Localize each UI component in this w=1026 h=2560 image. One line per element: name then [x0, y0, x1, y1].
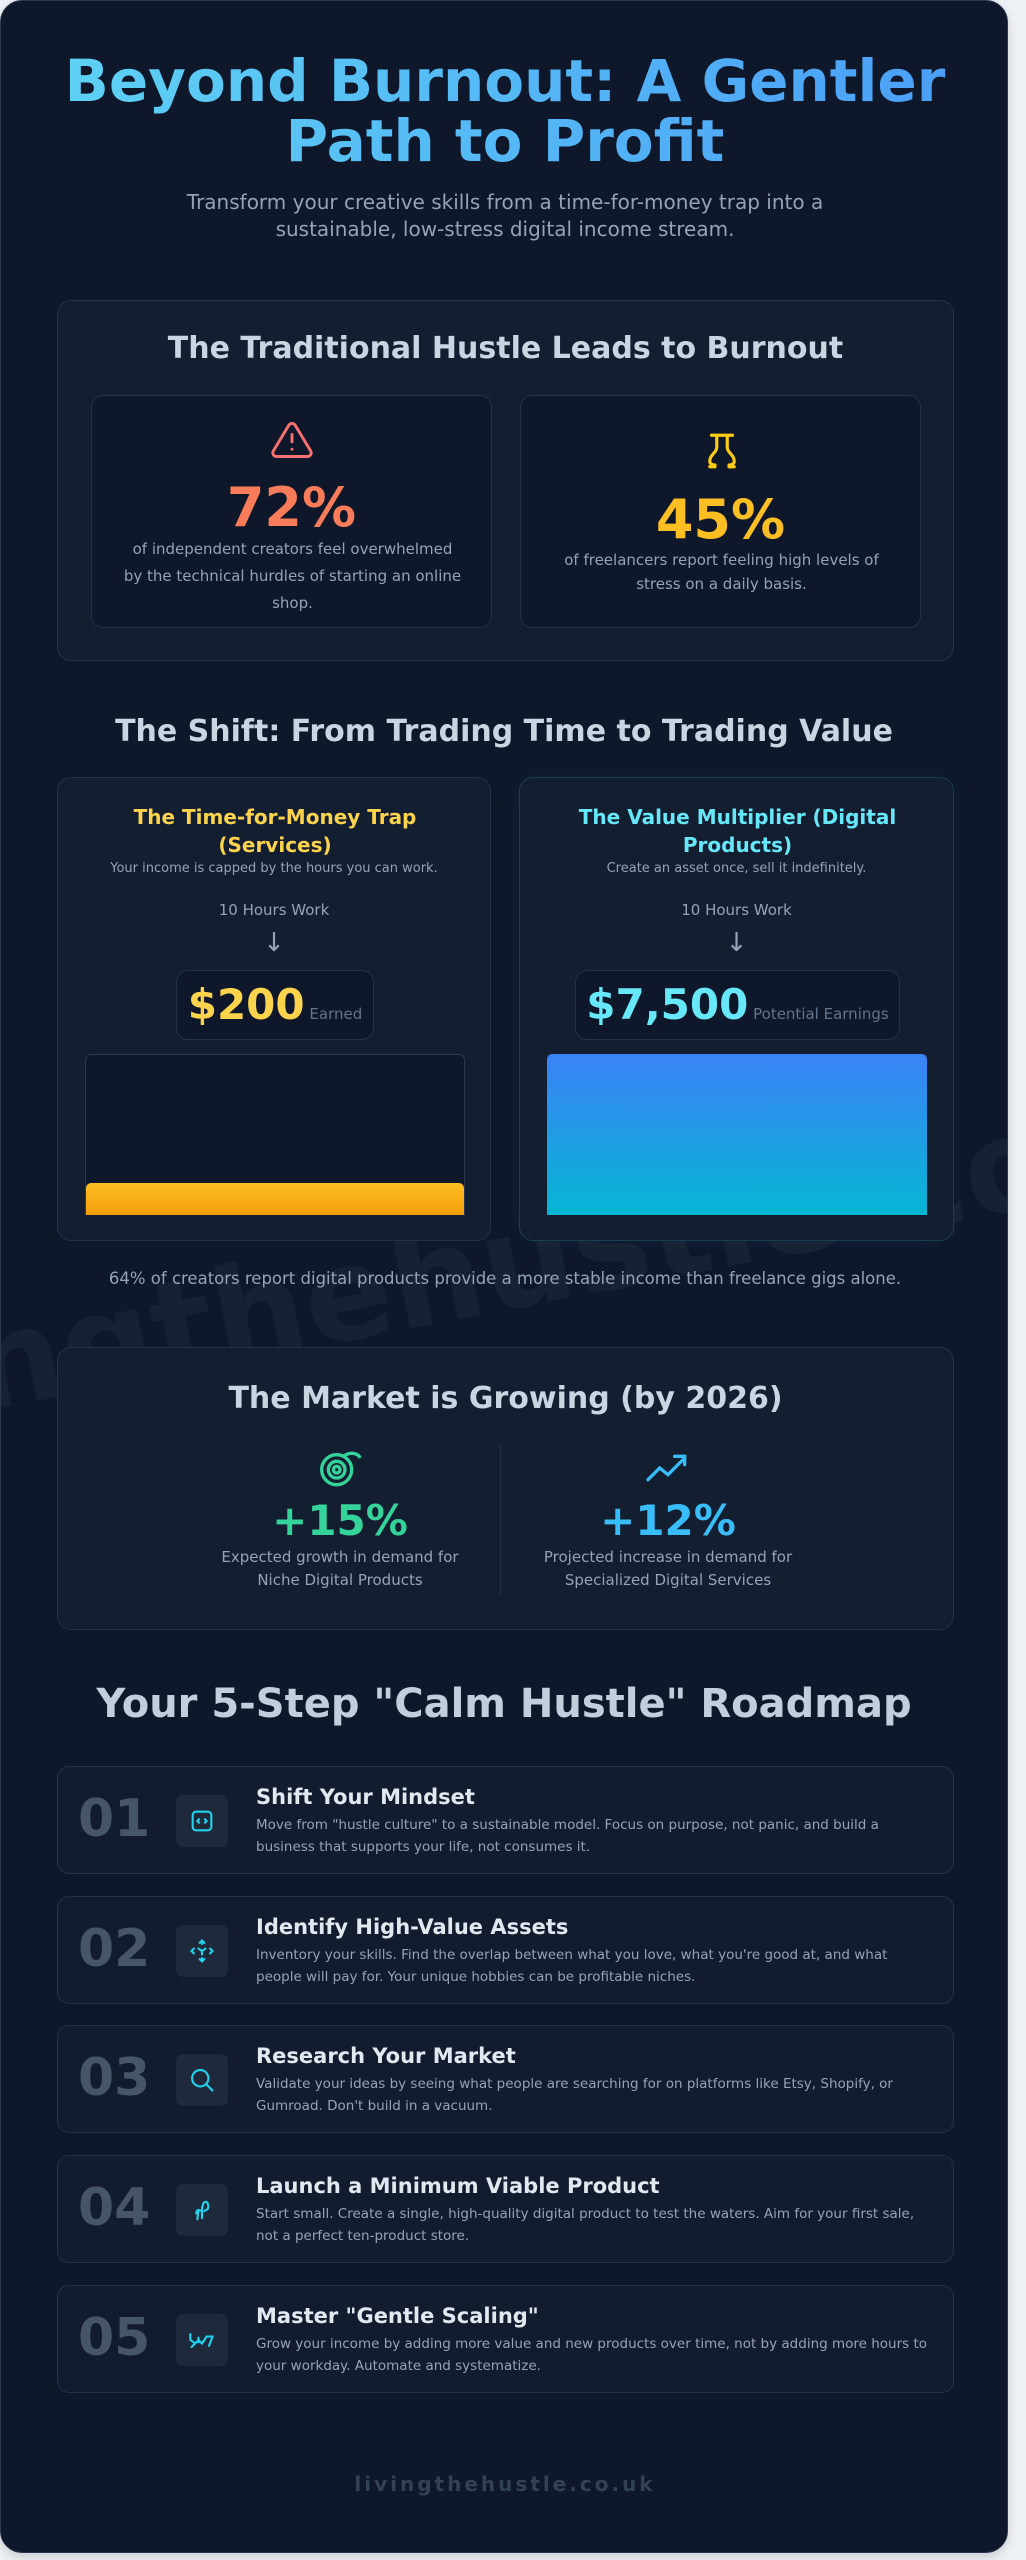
card title: The Time-for-Money Trap (Services) — [134, 805, 416, 857]
note: 64% of creators report digital products provide a more stable income than freelance gigs alone. — [109, 1269, 901, 1288]
icon: scaling — [176, 2314, 228, 2366]
step 5 — [57, 2285, 954, 2393]
earnings box: $200 Earned — [188, 980, 362, 1029]
stat: +15%: Expected growth in demand for — [221, 1548, 459, 1566]
stat 45%: 45% — [656, 488, 785, 551]
arrow: ↓ — [726, 928, 747, 958]
step 2: Inventory your skills. Find the overlap between what you love, what you're good at, and what people will pay for. Your unique hobbies can be profitable niches. — [256, 1947, 887, 1985]
panel: time-for-money: 10 Hours Work — [219, 901, 329, 919]
stat: +12%: Specialized Digital Services — [565, 1571, 771, 1589]
icon: warning — [271, 422, 313, 458]
panel: time-for-money: Your income is capped by the hours you can work. — [110, 861, 438, 876]
earnings box — [575, 970, 900, 1040]
heading: shift: The Shift: From Trading Time to Trading Value — [115, 714, 893, 749]
step 1: Shift Your Mindset — [256, 1785, 475, 1809]
step 2 — [57, 1896, 954, 2004]
step 2: 02 — [78, 1919, 150, 1979]
heading: burnout: The Traditional Hustle Leads to Burnout — [168, 331, 843, 366]
panel: market — [57, 1347, 954, 1630]
stat: +12%: Projected increase in demand for — [544, 1548, 792, 1566]
step 3: 03 — [78, 2048, 150, 2108]
icon: search — [176, 2054, 228, 2106]
step 4: 04 — [78, 2178, 150, 2238]
heading: market: The Market is Growing (by 2026) — [228, 1381, 783, 1416]
step 3 — [57, 2025, 954, 2133]
card: 72% — [91, 395, 492, 628]
card: 45% — [520, 395, 921, 628]
subtitle: Transform your creative skills from a time-for-money trap into a sustainable, low-stress digital income stream. — [187, 190, 823, 241]
icon: stress — [708, 434, 736, 468]
icon: trend — [646, 1454, 686, 1482]
step 5: Master "Gentle Scaling" — [256, 2304, 539, 2328]
stat: +15%: +15% — [272, 1496, 408, 1545]
icon: launch — [176, 2184, 228, 2236]
icon: code box — [176, 1795, 228, 1847]
step 4: Start small. Create a single, high-quality digital product to test the waters. Aim for your first sale, not a perfect ten-product store. — [256, 2206, 914, 2244]
icon: assets — [176, 1925, 228, 1977]
step 3: Validate your ideas by seeing what people are searching for on platforms like Etsy, Shopify, or Gumroad. Don't build in a vacuum. — [256, 2076, 893, 2114]
panel: value multiplier — [519, 777, 954, 1241]
step 1: 01 — [78, 1789, 150, 1849]
stat 72%: 72% — [227, 476, 356, 539]
panel: time-for-money — [57, 777, 491, 1241]
heading: roadmap: Your 5-Step "Calm Hustle" Roadmap — [96, 1681, 912, 1727]
panel: value multiplier: 10 Hours Work — [681, 901, 792, 919]
step 4: Launch a Minimum Viable Product — [256, 2174, 660, 2198]
title: Beyond Burnout: A Gentler — [65, 47, 945, 115]
footer: livingthehustle.co.uk — [354, 2472, 656, 2496]
panel: value multiplier: Create an asset once, sell it indefinitely. — [607, 861, 866, 876]
divider — [500, 1443, 501, 1595]
step 5: Grow your income by adding more value and new products over time, not by adding more hours to your workday. Automate and systematize. — [256, 2336, 927, 2374]
earnings box: $7,500 Potential Earnings — [586, 980, 889, 1029]
stat: +15%: Niche Digital Products — [257, 1571, 423, 1589]
step 1 — [57, 1766, 954, 1874]
step 5: 05 — [78, 2308, 150, 2368]
panel: burnout — [57, 300, 954, 661]
stat: +12% — [544, 1454, 792, 1589]
step 3: Research Your Market — [256, 2044, 516, 2068]
title: Path to Profit — [286, 107, 724, 175]
bar chart: small — [85, 1054, 465, 1215]
step 2: Identify High-Value Assets — [256, 1915, 568, 1939]
stat: +12%: +12% — [600, 1496, 736, 1545]
text: of independent creators feel overwhelmed by the technical hurdles of starting an online shop. — [124, 540, 461, 612]
step 4 — [57, 2155, 954, 2263]
stat: +15% — [221, 1452, 459, 1589]
panel: value multiplier: The Value Multiplier (Digital Products) — [579, 805, 896, 857]
icon: target — [320, 1452, 362, 1486]
text: of freelancers report feeling high levels of stress on a daily basis. — [564, 551, 879, 593]
step 1: Move from "hustle culture" to a sustainable model. Focus on purpose, not panic, and build a business that supports your life, not consumes it. — [256, 1817, 879, 1855]
arrow: ↓ — [263, 928, 285, 958]
earnings box — [176, 970, 374, 1040]
bar chart: large — [547, 1054, 927, 1215]
title — [1, 51, 1009, 171]
